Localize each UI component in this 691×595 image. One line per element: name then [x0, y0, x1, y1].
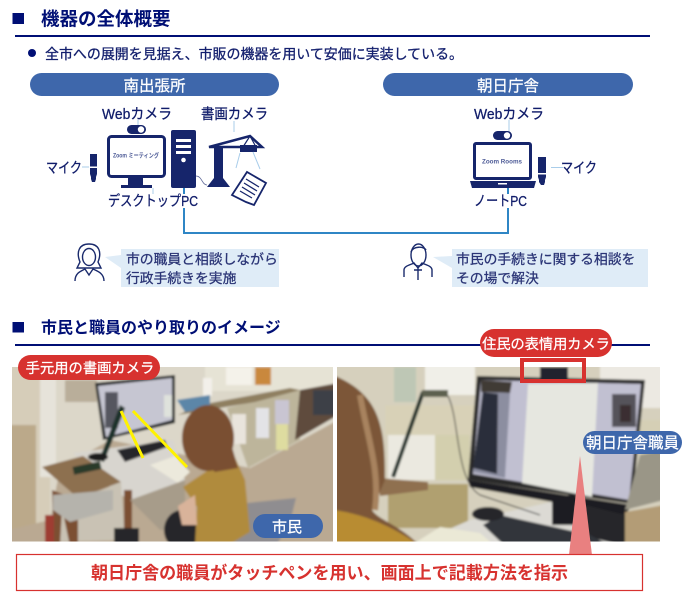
- icon: Web camera, Asahi: [493, 131, 512, 140]
- label: citizen face camera: [480, 329, 612, 357]
- label: citizen: [253, 514, 323, 538]
- icon: laptop: [470, 144, 536, 188]
- label: citizen face camera: 住民の表情用カメラ: [482, 337, 610, 353]
- callout: citizen: 市民の手続きに関する相談を: [456, 251, 635, 267]
- icon: PC tower: [171, 130, 196, 188]
- label: document camera: [18, 355, 160, 380]
- heading: interaction image: [12, 318, 650, 346]
- device labels, Asahi: Webカメラ: [474, 107, 544, 123]
- label: Asahi staff: [583, 431, 682, 454]
- device labels, Minami: デスクトップPC: [108, 192, 198, 210]
- heading: overview: 機器の全体概要: [41, 8, 171, 30]
- callout: caption: 朝日庁舎の職員がタッチペンを用い、画面上で記載方法を指示: [91, 563, 568, 583]
- photo: monitor at Asahi building: [333, 363, 664, 546]
- arrow: pointer to screen: [569, 456, 592, 555]
- bullet text: 全市への展開を見据え、市販の機器を用いて安価に実装している。: [45, 46, 463, 62]
- icon: female staff: [75, 244, 104, 281]
- heading: interaction image: 市民と職員のやり取りのイメージ: [41, 318, 281, 337]
- callout: citizen: [433, 249, 648, 287]
- marker: camera highlight frame: [522, 360, 584, 381]
- pill: Asahi building: 朝日庁舎: [477, 77, 539, 95]
- device labels, Asahi: ノートPC: [474, 194, 527, 210]
- pill: Asahi building: [383, 73, 633, 96]
- heading: overview: [12, 8, 650, 37]
- icon: Web camera, Minami: [127, 125, 146, 134]
- icon: microphone, Asahi: [538, 157, 563, 185]
- device labels, Minami: 書画カメラ: [201, 106, 268, 123]
- connection line: [184, 186, 508, 233]
- device labels, Asahi: マイク: [561, 160, 597, 177]
- label: Asahi staff: 朝日庁舎職員: [586, 434, 679, 452]
- callout: citizen: その場で解決: [456, 271, 539, 286]
- callout: staff: 行政手続きを実施: [126, 270, 237, 286]
- icon: laptop: Zoom Rooms: [482, 158, 522, 166]
- callout: caption: [16, 554, 642, 590]
- photo: citizen at desk: [8, 363, 338, 550]
- icon: desktop monitor: [108, 136, 164, 188]
- callout: staff: 市の職員と相談しながら: [126, 252, 278, 267]
- label: citizen: 市民: [272, 519, 302, 536]
- device labels, Minami: Webカメラ: [102, 107, 172, 123]
- icon: desktop monitor: Zoom ミーティング: [113, 150, 159, 160]
- device labels, Minami: [46, 106, 268, 210]
- icon: document camera: [196, 136, 266, 205]
- device labels, Asahi: [474, 107, 597, 210]
- pill: Minami office: 南出張所: [123, 77, 186, 95]
- label: document camera: 手元用の書画カメラ: [26, 360, 154, 377]
- callout: staff: [105, 249, 279, 287]
- pill: Minami office: [30, 73, 279, 96]
- icon: microphone, Minami: [82, 154, 97, 182]
- icon: male citizen: [404, 244, 432, 280]
- device labels, Minami: マイク: [46, 160, 82, 177]
